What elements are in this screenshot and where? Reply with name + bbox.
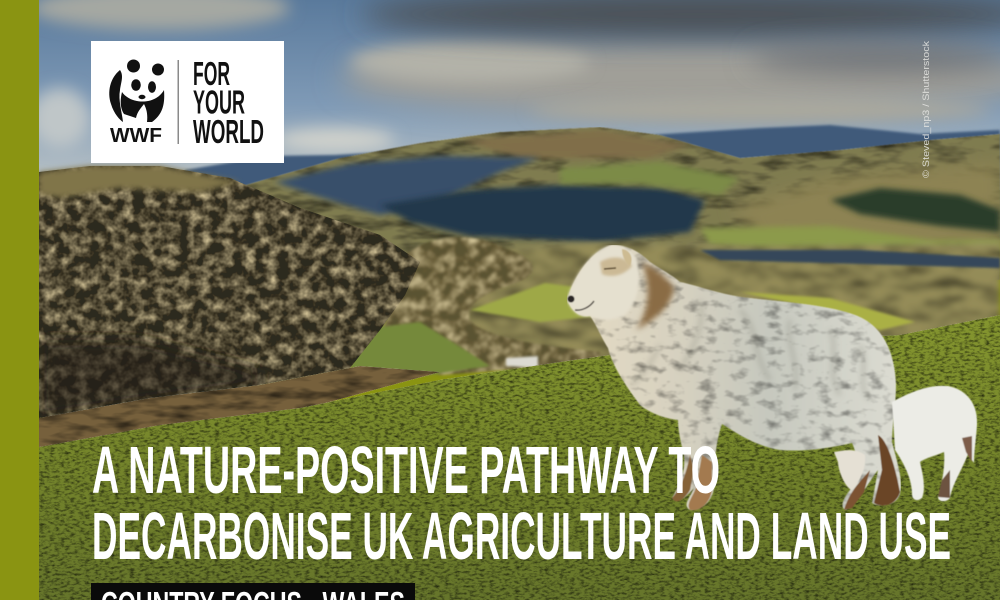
- olive side bar: [0, 0, 39, 600]
- valley floor: [350, 243, 1000, 375]
- far blue ridge: [185, 125, 1000, 240]
- green field: [346, 322, 490, 376]
- WWF wordmark: WWF: [110, 125, 162, 147]
- ewe leg markings: [874, 435, 900, 505]
- WWF logo panel: [91, 41, 284, 163]
- lamb head: [834, 450, 865, 490]
- photo credit: © Steved_np3 / Shutterstock: [921, 40, 931, 178]
- logo divider: [178, 60, 179, 144]
- sky with clouds: [30, 0, 1000, 190]
- ewe head details: [600, 257, 632, 276]
- bracken slope: [39, 366, 440, 450]
- distant town band: [700, 250, 1000, 268]
- ewe face: [567, 245, 639, 320]
- sheep: lamb: [834, 386, 977, 501]
- valley woodland clumps: [385, 237, 600, 375]
- farmhouse: [506, 356, 538, 368]
- sheep: ewe: [567, 245, 901, 510]
- slogan: [193, 55, 264, 150]
- left wooded hill: [39, 166, 420, 418]
- yellow-green field strips: [470, 283, 915, 330]
- title: [92, 433, 951, 574]
- lamb leg markings: [962, 436, 972, 462]
- slogan: FOR: [193, 55, 230, 92]
- country focus label: [91, 583, 415, 600]
- ewe wool streaks: [630, 300, 870, 400]
- ewe neck brown patch: [636, 262, 674, 330]
- icon: WWF panda: [109, 60, 164, 122]
- slogan: YOUR: [193, 84, 245, 120]
- main mountain: [235, 127, 1000, 280]
- slogan: WORLD: [193, 113, 264, 150]
- foreground grass: [39, 315, 1000, 600]
